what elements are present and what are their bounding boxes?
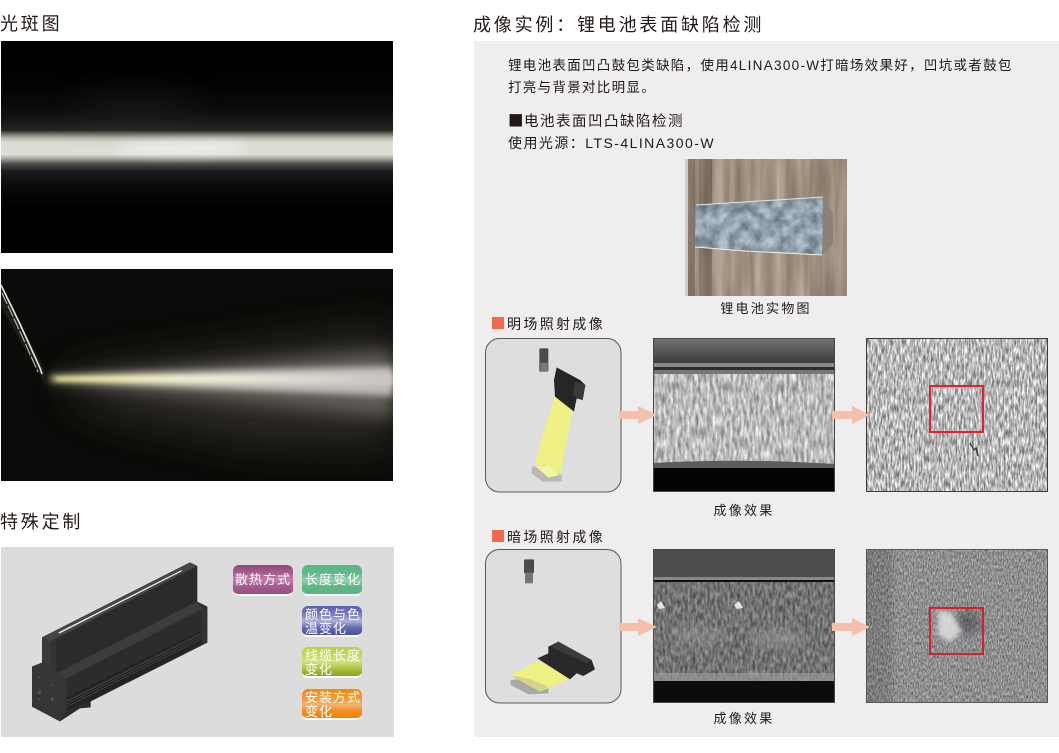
description text: 锂电池表面凹凸鼓包类缺陷，使用4LINA300-W打暗场效果好，凹坑或者鼓包 xyxy=(508,58,1013,73)
description text: 打亮与背景对比明显。 xyxy=(508,80,656,95)
diagram: dark field setup xyxy=(485,549,622,704)
heading: imaging example: 成像实例：锂电池表面缺陷检测 xyxy=(473,15,764,35)
arrow: bright field to image xyxy=(619,406,657,424)
button: colour and temperature xyxy=(302,606,362,637)
arrow: dark field to image xyxy=(619,618,657,636)
button: length: 长度变化 xyxy=(305,572,361,587)
caption: bright field result: 成像效果 xyxy=(713,503,774,518)
button: cable length: 变化 xyxy=(305,662,333,677)
button: length xyxy=(302,565,362,596)
heading: customization: 特殊定制 xyxy=(0,512,83,532)
image: dark field result xyxy=(653,549,835,703)
light spot photo 1 xyxy=(1,41,393,253)
image: dark field processed xyxy=(866,549,1048,703)
button: cable length xyxy=(302,647,362,678)
red box: bright field defect xyxy=(929,385,984,433)
button: mounting xyxy=(302,689,362,720)
button: mounting: 安装方式 xyxy=(305,690,361,705)
button: heat dissipation xyxy=(233,565,293,596)
light spot photo 2 xyxy=(1,269,393,481)
section marker: dark field xyxy=(492,530,504,542)
photo: lithium battery xyxy=(685,159,847,296)
image: bright field result xyxy=(653,338,835,492)
panel: imaging example xyxy=(474,41,1059,737)
description text xyxy=(508,58,1013,95)
button: colour and temperature: 颜色与色 xyxy=(305,607,361,622)
diagram: bright field setup xyxy=(485,338,622,492)
heading: light spot: 光斑图 xyxy=(0,14,62,34)
arrow: dark image to processed xyxy=(832,618,870,636)
subheading: surface defect detection: ■电池表面凹凸缺陷检测 xyxy=(508,109,684,131)
section heading: dark field: 暗场照射成像 xyxy=(507,529,605,545)
button: mounting: 变化 xyxy=(305,704,333,719)
panel: customization xyxy=(1,547,394,737)
light source text: 使用光源：LTS-4LINA300-W xyxy=(508,135,715,151)
button: cable length: 线缆长度 xyxy=(305,648,361,663)
arrow: bright image to processed xyxy=(832,406,870,424)
caption: battery photo: 锂电池实物图 xyxy=(720,301,812,316)
section marker: bright field xyxy=(492,317,504,329)
button: colour and temperature: 温变化 xyxy=(305,621,347,636)
section heading: bright field: 明场照射成像 xyxy=(507,316,605,332)
button: heat dissipation: 散热方式 xyxy=(235,572,291,587)
illustration: linear light device xyxy=(32,562,208,722)
caption: dark field result: 成像效果 xyxy=(713,711,774,726)
red box: dark field defect xyxy=(929,607,984,655)
image: bright field processed xyxy=(866,338,1048,492)
